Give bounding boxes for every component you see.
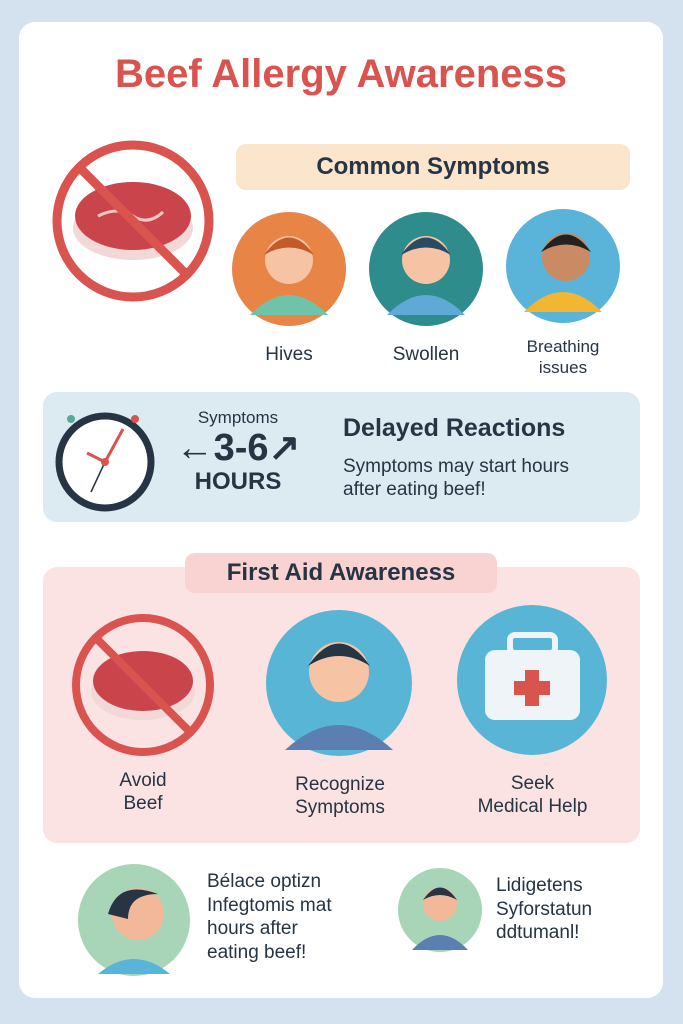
bottom text 1: Infegtomis mat: [207, 894, 332, 916]
bottom text 2: Syforstatun: [496, 898, 592, 920]
heading: First Aid Awareness: [185, 553, 497, 593]
item: seek medical help: [457, 605, 607, 817]
heading: First Aid Awareness: First Aid Awareness: [227, 559, 455, 586]
bottom text 2: Lidigetens: [496, 875, 583, 896]
text: delayed reactions: Symptoms may start hours: [343, 456, 569, 477]
bottom text 1: hours after: [207, 918, 298, 939]
text: 3-6 hours: [176, 408, 300, 495]
panel: delayed reactions: [43, 392, 640, 522]
item: seek medical help: Seek: [511, 773, 554, 794]
heading: Common Symptoms: [236, 144, 630, 190]
symptom: breathing: Breathing: [527, 337, 599, 356]
symptom: hives: [232, 212, 346, 365]
text: 3-6 hours: HOURS: [195, 468, 281, 495]
bottom text 2: ddtumanl!: [496, 922, 579, 943]
item: avoid beef: [72, 614, 214, 814]
symptom: hives: Hives: [265, 344, 313, 365]
icon: no beef top: [52, 140, 214, 302]
heading: Common Symptoms: Common Symptoms: [316, 153, 550, 180]
text: 3-6 hours: ←3-6↗: [176, 427, 300, 469]
symptom: swollen: [369, 212, 483, 365]
panel: first aid: [43, 567, 640, 843]
symptom: breathing: issues: [539, 358, 587, 377]
item: avoid beef: Beef: [123, 793, 163, 814]
item: seek medical help: Medical Help: [478, 796, 587, 817]
text: 3-6 hours: Symptoms: [198, 408, 278, 427]
item: avoid beef: Avoid: [119, 770, 167, 791]
symptom: swollen: Swollen: [393, 344, 459, 365]
text: delayed reactions: [343, 414, 569, 500]
bottom: person 2: [398, 868, 482, 952]
symptom: breathing: [506, 209, 620, 377]
text: delayed reactions: after eating beef!: [343, 479, 486, 500]
icon: clock: [56, 412, 154, 512]
bottom text 2: [496, 875, 592, 943]
bottom text 1: Bélace optizn: [207, 871, 321, 892]
bottom: person 1: [78, 864, 190, 976]
item: recognize symptoms: Symptoms: [295, 797, 385, 818]
item: recognize symptoms: [266, 610, 412, 818]
title: Beef Allergy Awareness: [115, 52, 567, 96]
text: delayed reactions: Delayed Reactions: [343, 414, 565, 442]
bottom text 1: eating beef!: [207, 942, 306, 962]
item: recognize symptoms: Recognize: [295, 774, 385, 795]
bottom text 1: [207, 871, 332, 962]
